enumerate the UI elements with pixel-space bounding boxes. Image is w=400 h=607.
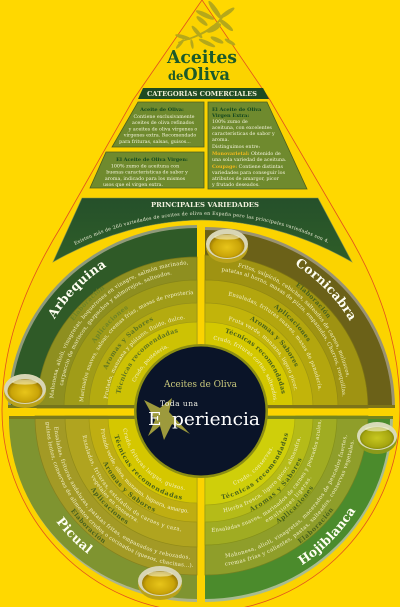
ring text: Aromas y Sabores: Frutado verde, oliva, manzana, higuera, amargo. bbox=[100, 428, 188, 513]
ring text: Aplicaciones: Aplicaciones bbox=[274, 304, 310, 342]
ring text: Aromas y Sabores: Aromas y Sabores bbox=[250, 316, 298, 366]
panel: Aceite de Oliva Virgen Extra: Virgen Extra: bbox=[211, 113, 249, 119]
ring text: Elaboración: Mahonesa, alioli, vinagretas, boquerones en vinagre, salmón marinado, bbox=[49, 260, 188, 398]
panel: Cornicabra bbox=[204, 227, 395, 408]
ring text: Aplicaciones: Aplicaciones bbox=[276, 486, 313, 524]
big word: Experiencia: Experiencia bbox=[148, 409, 260, 430]
ring text: Aplicaciones: Ensaladas suaves, marinados de carnes y pescados azules, bbox=[212, 420, 322, 532]
panel: Aceite de Oliva Virgen: aroma, indicado para los mismos bbox=[105, 176, 186, 182]
label: Cornicabra: Cornicabra bbox=[296, 259, 354, 322]
heading: categorías comerciales: CATEGORÍAS COMERCIALES bbox=[147, 89, 257, 98]
icon: oil bowl Cornicabra bbox=[206, 229, 248, 263]
ring text: Elaboración: Elaboración bbox=[296, 282, 330, 318]
ring text: Elaboración: Elaboración bbox=[70, 287, 104, 321]
panel: Aceite de Oliva Virgen Extra: una sola variedad de aceituna. bbox=[212, 157, 287, 163]
ring text: Aplicaciones: Ensaladas, frituras suaves, masas de panadería. bbox=[228, 292, 322, 390]
icon: olive branch bbox=[175, 0, 236, 50]
ring text: Técnicas recomendadas: Técnicas recomendadas bbox=[116, 329, 178, 394]
ring text: Técnicas recomendadas: Crudo, conservas. bbox=[232, 445, 275, 487]
ring text: Elaboración: Ensaladas, frituras andaluzas, patatas fritas, empanados y rebozados, bbox=[54, 426, 190, 560]
icon: olive splash bbox=[144, 398, 190, 440]
ring text: Técnicas recomendadas: Técnicas recomendadas bbox=[114, 434, 182, 500]
panel: Aceite de Oliva: para frituras, salsas, guisos... bbox=[119, 139, 191, 145]
ring text: Elaboración: Elaboración bbox=[70, 508, 105, 544]
panel: Aceite de Oliva Virgen Extra: Monovarietal: Obtenido de bbox=[212, 151, 281, 157]
ring text: Aplicaciones: Aplicaciones bbox=[90, 488, 128, 524]
panel: Aceite de Oliva: vírgenes extra. Recomendado bbox=[123, 132, 196, 138]
panel: Picual bbox=[9, 416, 198, 602]
banner: principales variedades bbox=[52, 198, 353, 263]
icon: oil bowl Hojiblanca bbox=[357, 422, 397, 454]
ring text: Elaboración: Mahonesa, alioli, vinagretas, macerados de pescados fuertes, bbox=[225, 435, 348, 558]
ring text: Aplicaciones: Marinados suaves, salsas, cremas frías, masas de repostería bbox=[79, 290, 194, 402]
center heading: Aceites de Oliva bbox=[163, 380, 238, 390]
panel: Aceite de Oliva Virgen Extra bbox=[208, 102, 307, 189]
panel: Aceite de Oliva Virgen Extra: Distinguimos entre: bbox=[212, 144, 260, 150]
ring text: Elaboración: carpaccio de mariscos, gazpachos y salmorejos, salteados. bbox=[60, 272, 172, 386]
label: Arbequina: Arbequina bbox=[49, 262, 106, 320]
center circle: Toda una Experiencia bbox=[134, 344, 268, 478]
panel: Aceite de Oliva: y aceites de oliva vírgenes o bbox=[128, 126, 197, 132]
ring text: Técnicas recomendadas: Técnicas recomendadas bbox=[226, 328, 285, 394]
title bbox=[166, 47, 237, 85]
panel: Aceite de Oliva Virgen Extra: Coupage: Contiene distintas bbox=[212, 164, 283, 170]
icon: oil bowl Arbequina bbox=[4, 374, 46, 408]
panel: Aceite de Oliva: aceites de oliva refinados bbox=[132, 120, 195, 126]
banner: principales variedades: PRINCIPALES VARIEDADES bbox=[151, 201, 259, 209]
ring text: Elaboración: guisos lentos, conservas de alimentos crudos o cocinados (quesos, chacinas...). bbox=[45, 422, 193, 568]
panel: Aceite de Oliva Virgen Extra: características de sabor y bbox=[212, 130, 275, 137]
ring text: Elaboración: patatas al horno, masas de pizza, empanadas. Churros, rosquillas. bbox=[221, 268, 346, 396]
ring text: Técnicas recomendadas: Técnicas recomendadas bbox=[221, 432, 290, 501]
icon: oil bowl Picual bbox=[138, 566, 182, 600]
panel: Aceite de Oliva Virgen Extra: aceituna, con excelentes bbox=[212, 125, 272, 131]
ring text: Técnicas recomendadas: Crudo, frituras largas, guisos. bbox=[123, 428, 184, 490]
panel: Aceite de Oliva Virgen bbox=[90, 152, 204, 188]
label: Hojiblanca: Hojiblanca bbox=[297, 508, 356, 565]
banner: principales variedades: Existen más de 260 variedades de aceites de oliva en España pero las principales variedades son 4. bbox=[74, 211, 328, 245]
panel: Aceite de Oliva Virgen: buenas características de sabor y bbox=[106, 168, 188, 176]
panel: Aceite de Oliva Virgen Extra: aroma. bbox=[212, 138, 229, 143]
ring text: Aplicaciones: Aplicaciones bbox=[92, 306, 128, 344]
ring text: Aromas y Sabores: Fruta verde, manzana, ligero picor. bbox=[228, 316, 297, 390]
ring text: Aromas y Sabores: Aromas y Sabores bbox=[103, 462, 156, 512]
tagline: Toda una bbox=[160, 399, 199, 408]
ring text: Elaboración: Elaboración bbox=[297, 508, 334, 544]
title line: de Oliva: deOliva bbox=[168, 65, 230, 85]
heading: categorías comerciales bbox=[138, 88, 269, 99]
panel: Aceite de Oliva: Contiene exclusivamente bbox=[133, 114, 195, 120]
panel: Aceite de Oliva: Aceite de Oliva: bbox=[139, 107, 184, 113]
ring text: Elaboración: cremas frías y calientes, pastas, salteados, conservas vegetales. bbox=[225, 440, 354, 566]
panel: Aceite de Oliva Virgen Extra: y frutado deseados. bbox=[211, 182, 260, 188]
ring text: Aromas y Sabores: Aromas y Sabores bbox=[250, 458, 302, 512]
panel: Aceite de Oliva Virgen Extra: atributos de amargor, picor bbox=[212, 176, 280, 182]
panel: Aceite de Oliva Virgen Extra: variedades para conseguir los bbox=[211, 170, 286, 176]
ring text: Aplicaciones: vegetales en conserva. bbox=[92, 474, 138, 522]
panel: Aceite de Oliva Virgen: El Aceite de Oliva Virgen: bbox=[116, 157, 188, 163]
panel: Aceite de Oliva Virgen Extra: 100% zumo de bbox=[212, 119, 248, 125]
title line: Aceites: Aceites bbox=[166, 47, 237, 68]
panel: Aceite de Oliva Virgen: usos que el virgen extra. bbox=[103, 182, 164, 188]
panel: Hojiblanca bbox=[204, 416, 393, 602]
ring text: Aplicaciones: Ensaladas, frituras, estofados de carnes y caza, bbox=[82, 435, 182, 532]
panel: Arbequina bbox=[8, 225, 198, 408]
ring text: Técnicas recomendadas: Crudo, pastelería. bbox=[132, 346, 168, 382]
ring text: Técnicas recomendadas: Crudo, frituras cortas, salteados. bbox=[214, 336, 276, 402]
label: Picual: Picual bbox=[56, 516, 93, 554]
ring text: Aromas y Sabores: Aromas y Sabores bbox=[104, 318, 153, 370]
ring text: Elaboración: Fritos, salpicón, cebiches, salteados de carnes, moluscos, bbox=[238, 263, 349, 377]
panel: Aceite de Oliva bbox=[112, 102, 204, 147]
ring text: Aromas y Sabores: Hierba fresca, ligero picor, almendra. bbox=[223, 436, 303, 514]
ring text: Aromas y Sabores: Frutado, manzana y plátano, fluido, dulce. bbox=[104, 316, 184, 399]
ring text: Aplicaciones: emulsiones ligeras. bbox=[266, 478, 312, 522]
panel: Aceite de Oliva Virgen: 100% zumo de aceituna con bbox=[111, 164, 179, 170]
panel: Aceite de Oliva Virgen Extra: El Aceite de Oliva bbox=[212, 107, 262, 113]
